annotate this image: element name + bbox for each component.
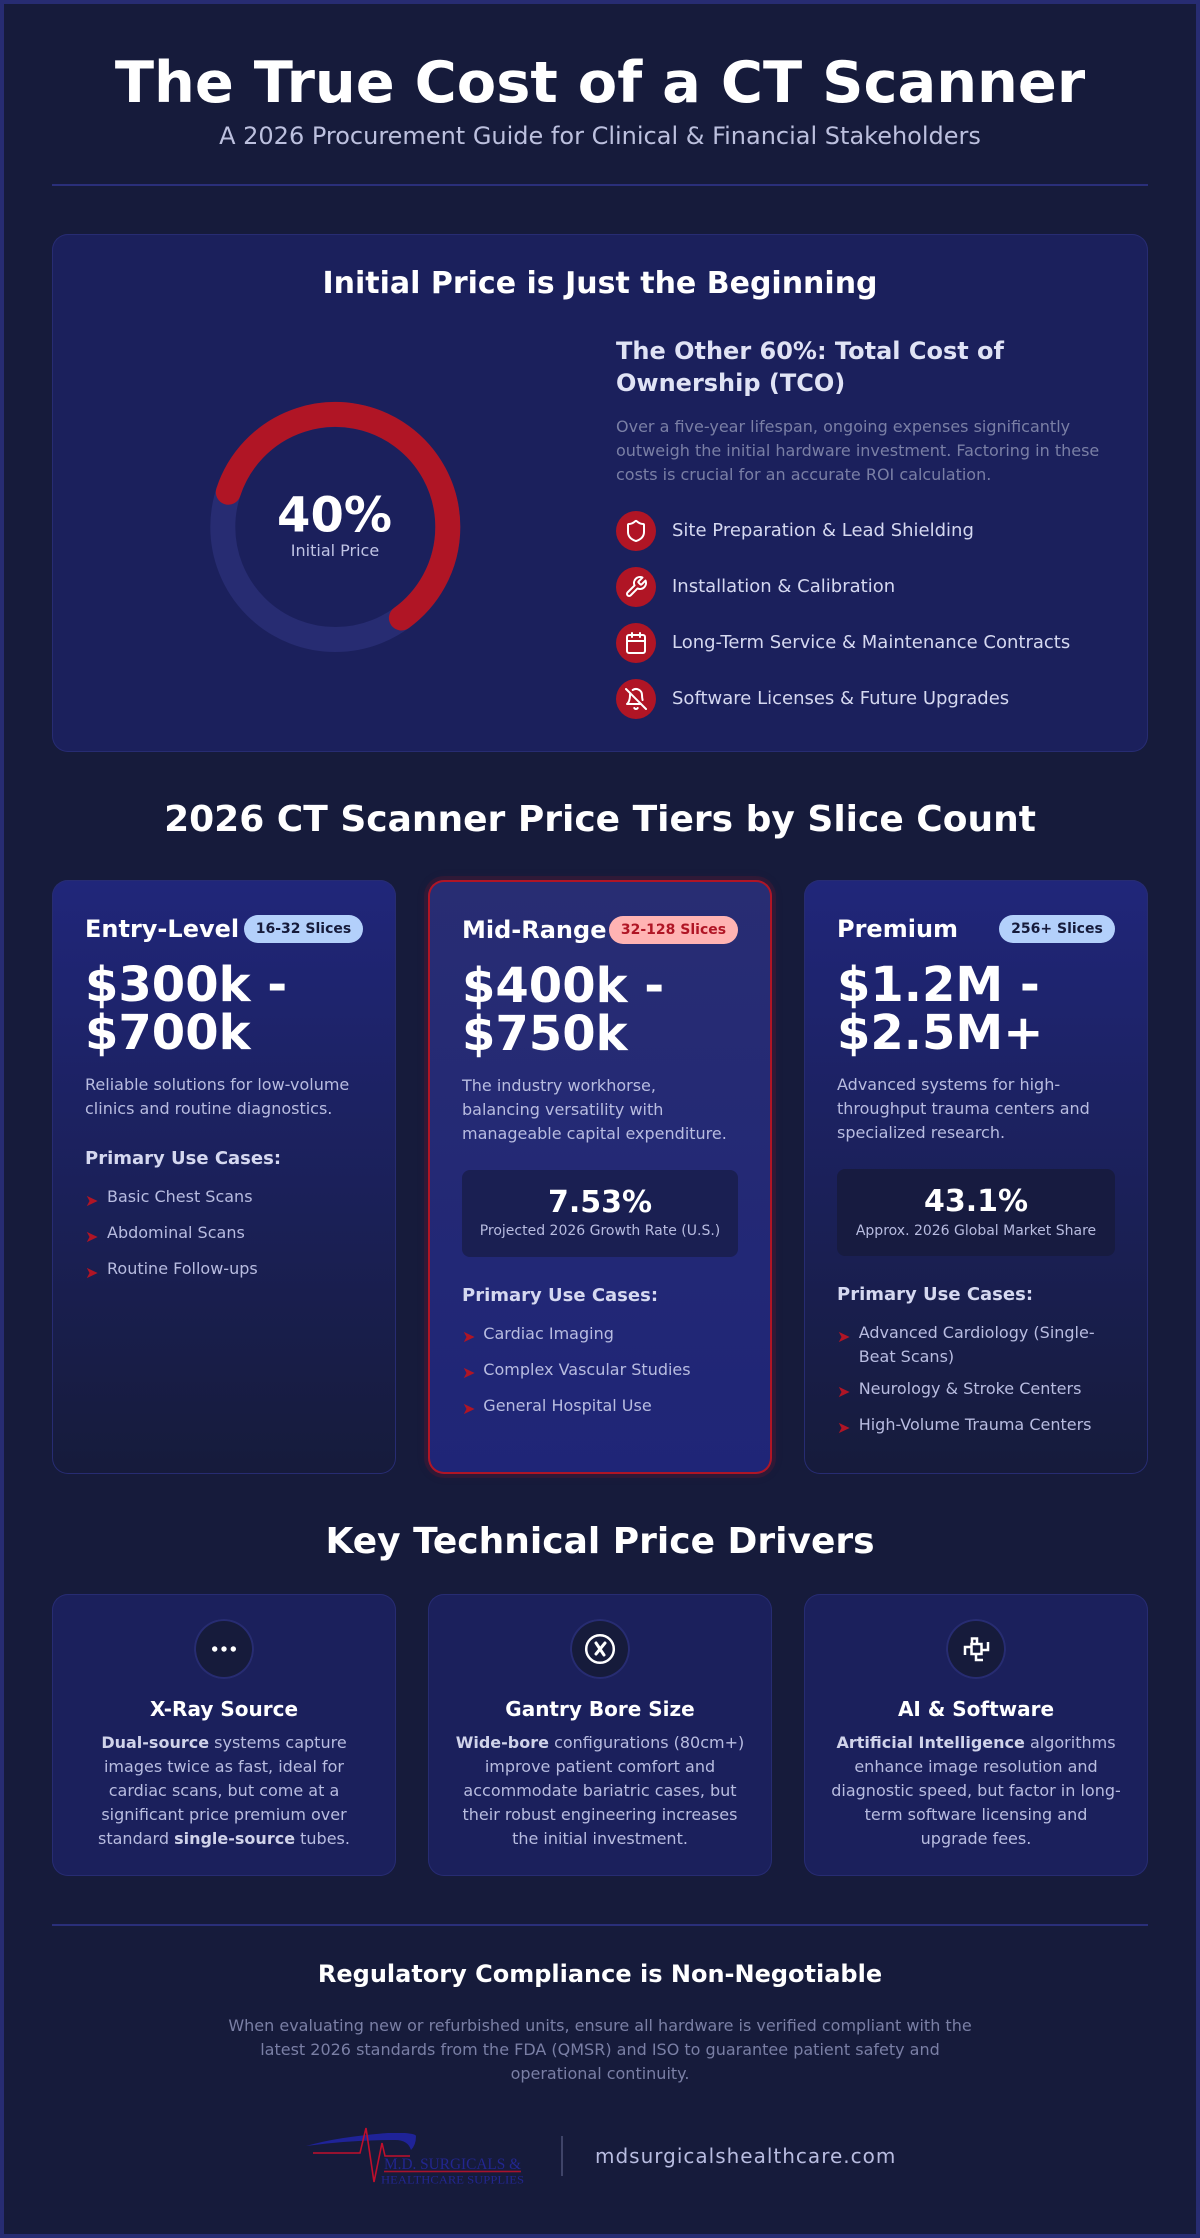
- TCO description: [616, 416, 1099, 484]
- stat: market share: [837, 1169, 1115, 1256]
- list item: software licenses: [616, 679, 1009, 719]
- TCO heading: Ownership (TCO): [616, 369, 845, 397]
- icon: bell off: [616, 679, 656, 719]
- use cases heading: Primary Use Cases:: [837, 1284, 1033, 1305]
- use cases list: ➤: [462, 1399, 475, 1418]
- price: [85, 957, 287, 1061]
- driver title: X-Ray Source: [150, 1697, 298, 1721]
- use cases list: ➤: [837, 1382, 850, 1401]
- slice badge: [609, 916, 738, 944]
- list item: service contracts: [616, 623, 1070, 663]
- use cases list: ➤: [85, 1190, 98, 1210]
- list item: installation: [616, 567, 895, 607]
- price: [462, 958, 664, 1062]
- list item: site preparation: [616, 511, 974, 551]
- use cases list: Abdominal Scans: [107, 1223, 245, 1242]
- website url: mdsurgicalshealthcare.com: [595, 2144, 896, 2168]
- price: $300k -: [85, 957, 287, 1013]
- slice badge: 256+ Slices: [1011, 921, 1103, 937]
- driver text: improve patient comfort and: [485, 1757, 715, 1776]
- donut chart: 40% initial price: [210, 402, 460, 652]
- use cases list: ➤: [85, 1262, 98, 1282]
- driver text: Artificial Intelligence algorithms: [836, 1733, 1116, 1752]
- card: mid-range: [428, 880, 772, 1474]
- driver text: accommodate bariatric cases, but: [463, 1781, 737, 1800]
- icon: pinwheel chip: [946, 1619, 1006, 1679]
- regulatory heading: Regulatory Compliance is Non-Negotiable: [318, 1960, 882, 1988]
- stat: market share: Approx. 2026 Global Market Share: [856, 1223, 1096, 1239]
- use cases list: High-Volume Trauma Centers: [859, 1415, 1092, 1434]
- stat: market share: 43.1%: [924, 1184, 1028, 1219]
- price: $400k -: [462, 958, 664, 1014]
- list item: site preparation: Site Preparation & Lead Shielding: [672, 520, 974, 541]
- description: throughput trauma centers and: [837, 1099, 1090, 1118]
- TCO description: Over a five-year lifespan, ongoing expenses significantly: [616, 416, 1070, 436]
- panel heading: Initial Price is Just the Beginning: [322, 266, 878, 301]
- regulatory text: When evaluating new or refurbished units, ensure all hardware is verified compliant with the: [228, 2016, 972, 2034]
- tier name: Mid-Range: [462, 916, 606, 944]
- logo: M.D. Surgicals: [306, 2128, 524, 2186]
- heading: price tiers: 2026 CT Scanner Price Tiers by Slice Count: [164, 798, 1036, 840]
- price: $750k: [462, 1006, 628, 1062]
- driver text: their robust engineering increases: [463, 1805, 737, 1824]
- slice badge: 32-128 Slices: [621, 922, 726, 938]
- driver text: diagnostic speed, but factor in long-: [831, 1781, 1121, 1800]
- use cases list: [462, 1324, 691, 1418]
- price: $2.5M+: [837, 1005, 1043, 1061]
- use cases list: General Hospital Use: [483, 1396, 652, 1415]
- icon: calendar: [616, 623, 656, 663]
- description: The industry workhorse,: [462, 1076, 656, 1094]
- description: specialized research.: [837, 1123, 1005, 1142]
- heading: price drivers: Key Technical Price Drivers: [325, 1520, 875, 1562]
- driver text: significant price premium over: [101, 1805, 347, 1824]
- stat: growth rate: [462, 1170, 738, 1257]
- driver text: [831, 1733, 1121, 1848]
- card: premium: [804, 880, 1148, 1474]
- driver text: Dual-source systems capture: [101, 1733, 347, 1752]
- use cases list: Beat Scans): [859, 1347, 954, 1366]
- slice badge: 16-32 Slices: [256, 921, 351, 937]
- use cases list: Neurology & Stroke Centers: [859, 1379, 1081, 1398]
- logo: M.D. Surgicals: HEALTHCARE SUPPLIES: [381, 2174, 524, 2186]
- TCO heading: [616, 337, 1004, 397]
- tier name: Entry-Level: [85, 915, 239, 943]
- donut chart: 40% initial price: Initial Price: [291, 541, 379, 560]
- driver text: cardiac scans, but come at a: [109, 1781, 339, 1800]
- use cases list: Basic Chest Scans: [107, 1187, 253, 1206]
- slice badge: [999, 915, 1115, 943]
- price: [837, 957, 1043, 1061]
- description: Reliable solutions for low-volume: [85, 1074, 349, 1094]
- driver card: x-ray source: [52, 1594, 396, 1876]
- description: [837, 1075, 1090, 1142]
- description: [85, 1074, 349, 1118]
- use cases list: Complex Vascular Studies: [483, 1360, 691, 1379]
- driver title: Gantry Bore Size: [505, 1697, 695, 1721]
- panel: initial price and TCO: [52, 234, 1148, 752]
- icon: dots: [194, 1619, 254, 1679]
- use cases list: Routine Follow-ups: [107, 1259, 258, 1278]
- use cases heading: Primary Use Cases:: [462, 1285, 658, 1306]
- icon: wrench: [616, 567, 656, 607]
- regulatory text: [228, 2016, 972, 2082]
- list item: installation: Installation & Calibration: [672, 576, 895, 597]
- driver text: enhance image resolution and: [854, 1757, 1098, 1776]
- description: [462, 1076, 727, 1142]
- driver card: gantry bore: [428, 1594, 772, 1876]
- driver text: Wide-bore configurations (80cm+): [456, 1733, 744, 1752]
- use cases list: ➤: [837, 1327, 850, 1346]
- card: entry-level: [52, 880, 396, 1474]
- list item: service contracts: Long-Term Service & Maintenance Contracts: [672, 632, 1070, 653]
- description: clinics and routine diagnostics.: [85, 1098, 332, 1118]
- use cases list: [837, 1323, 1095, 1437]
- description: Advanced systems for high-: [837, 1075, 1060, 1094]
- driver title: AI & Software: [898, 1697, 1054, 1721]
- regulatory text: latest 2026 standards from the FDA (QMSR) and ISO to guarantee patient safety and: [260, 2040, 940, 2058]
- use cases list: Cardiac Imaging: [483, 1324, 614, 1343]
- use cases heading: Primary Use Cases:: [85, 1148, 281, 1169]
- TCO description: costs is crucial for an accurate ROI calculation.: [616, 464, 991, 484]
- driver text: [456, 1733, 744, 1848]
- use cases list: Advanced Cardiology (Single-: [859, 1323, 1095, 1342]
- description: balancing versatility with: [462, 1100, 663, 1118]
- use cases list: ➤: [462, 1327, 475, 1346]
- icon: aperture circle: [570, 1619, 630, 1679]
- driver card: AI and software: [804, 1594, 1148, 1876]
- tier name: Premium: [837, 915, 958, 943]
- price: $700k: [85, 1005, 251, 1061]
- slice badge: [244, 915, 363, 943]
- use cases list: [85, 1187, 258, 1282]
- regulatory text: operational continuity.: [511, 2064, 689, 2082]
- TCO heading: The Other 60%: Total Cost of: [616, 337, 1004, 365]
- description: manageable capital expenditure.: [462, 1124, 727, 1142]
- list item: software licenses: Software Licenses & Future Upgrades: [672, 688, 1009, 709]
- driver text: the initial investment.: [512, 1829, 688, 1848]
- stat: growth rate: Projected 2026 Growth Rate (U.S.): [480, 1223, 720, 1239]
- driver text: term software licensing and: [865, 1805, 1087, 1824]
- driver text: [98, 1733, 350, 1848]
- use cases list: ➤: [837, 1418, 850, 1437]
- subtitle: A 2026 Procurement Guide for Clinical & Financial Stakeholders: [219, 122, 981, 150]
- price: $1.2M -: [837, 957, 1040, 1013]
- title: The True Cost of a CT Scanner: [115, 48, 1085, 116]
- driver text: images twice as fast, ideal for: [104, 1757, 344, 1776]
- logo: M.D. Surgicals: M.D. SURGICALS &: [384, 2156, 522, 2173]
- TCO description: outweigh the initial hardware investment. Factoring in these: [616, 440, 1099, 460]
- icon: shield: [616, 511, 656, 551]
- donut chart: 40% initial price: 40%: [277, 488, 392, 544]
- use cases list: ➤: [462, 1363, 475, 1382]
- stat: growth rate: 7.53%: [548, 1185, 652, 1220]
- driver text: standard single-source tubes.: [98, 1829, 350, 1848]
- use cases list: ➤: [85, 1226, 98, 1246]
- driver text: upgrade fees.: [921, 1829, 1031, 1848]
